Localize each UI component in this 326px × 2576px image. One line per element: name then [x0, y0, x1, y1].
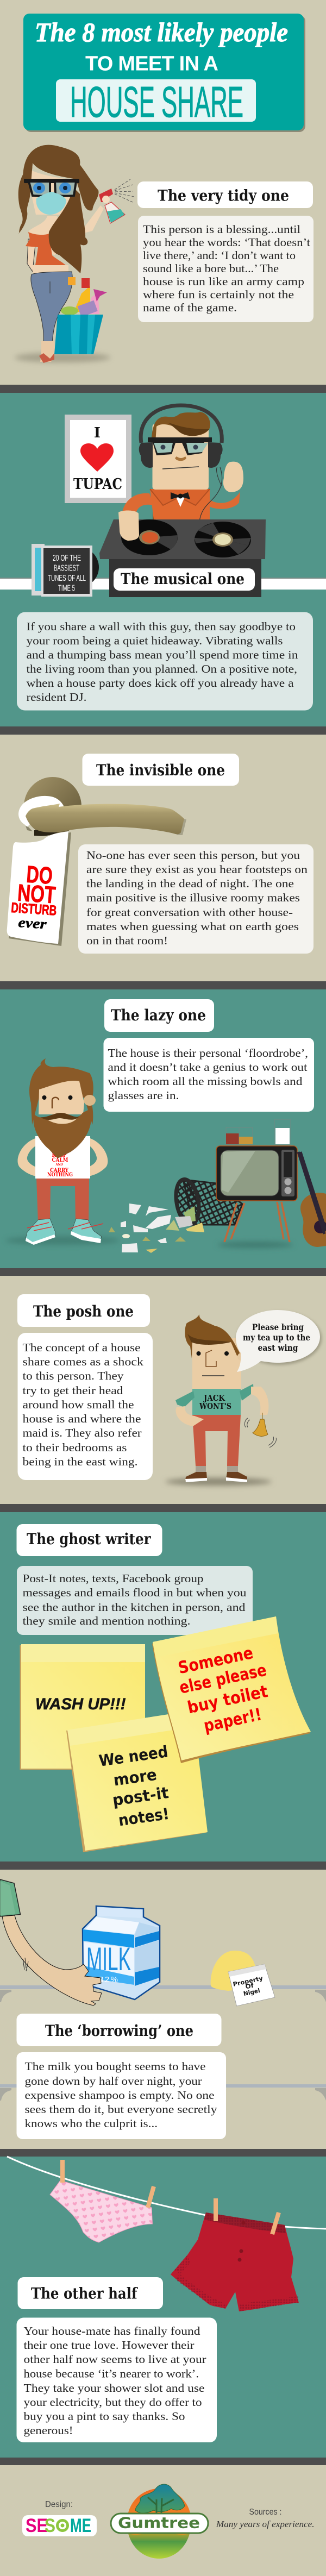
text block: other half description: They take your shower slot and use: [24, 2381, 204, 2395]
text block: musical description: resident DJ.: [26, 691, 87, 704]
heading: the very tidy one: The very tidy one: [158, 187, 289, 204]
text block: posh description: to this person. They: [23, 1369, 124, 1382]
text block: other half description: house because ‘it’s nearer to work’.: [24, 2367, 199, 2380]
text block: tidy description: This person is a blessing...until: [143, 223, 300, 236]
panel: the borrowing one: [0, 1870, 326, 2149]
text block: lazy description: The house is their personal ‘floordrobe’,: [108, 1046, 308, 1060]
heading: the very tidy one: [137, 181, 313, 208]
heading: the borrowing one: [16, 2014, 222, 2046]
illustration: washing line with underwear: [7, 2157, 326, 2311]
panel: the invisible one: [0, 735, 326, 981]
illustration: retro TV with drinks and guitar: [216, 1119, 326, 1248]
heading: the other half: The other half: [31, 2284, 138, 2303]
speech bubble: east wing: [258, 1343, 298, 1353]
illustration: cheese with label: Property: [233, 1975, 264, 1988]
poster: I love Tupac: TUPAC: [73, 476, 122, 493]
heading: the invisible one: The invisible one: [96, 761, 225, 779]
title plate: [56, 78, 256, 126]
post-it: someone else please buy toilet paper: buy toilet: [186, 1682, 269, 1718]
heading: the musical one: The musical one: [121, 570, 244, 588]
text block: tidy description: [138, 216, 314, 322]
illustration: cheese with label: [211, 1951, 275, 2006]
text block: tidy description: sound like a bore but...’ The: [143, 262, 279, 275]
heading: the ghost writer: The ghost writer: [27, 1530, 152, 1548]
text block: musical description: when a house party does kick off you already have a: [26, 676, 294, 690]
CD cover text: 20 OF THE: [53, 554, 81, 563]
logo: Gumtree: [111, 2484, 208, 2559]
panel: the other half: [0, 2157, 326, 2458]
post-it: someone else please buy toilet paper: [152, 1616, 311, 1763]
design credit: SE: [26, 2515, 48, 2536]
text block: borrowing description: knows who the culprit is...: [25, 2117, 158, 2130]
design credit: S: [45, 2515, 55, 2536]
sources credit: Many years of experience.: [216, 2519, 314, 2529]
CD cover text: [48, 554, 86, 593]
post-it: we need more post-it notes: notes!: [117, 1804, 171, 1829]
text block: musical description: [17, 612, 313, 711]
text block: posh description: maid is. They also refer: [23, 1426, 142, 1439]
text block: invisible description: for great conversation with other house-: [86, 906, 293, 919]
illustration: bearded hipster: [5, 1058, 120, 1245]
text block: tidy description: house is run like an army camp: [143, 275, 304, 288]
CD cover text: TIME 5: [58, 584, 75, 593]
logo: Gumtree: Gumtree: [118, 2514, 200, 2532]
heading: the lazy one: [104, 999, 214, 1032]
text block: tidy description: where fun is certainly not the: [143, 288, 294, 301]
text block: borrowing description: The milk you bought seems to have: [25, 2060, 205, 2073]
heading: the ghost writer: [16, 1524, 162, 1556]
post-it: we need more post-it notes: post-it: [111, 1783, 170, 1809]
heading: the posh one: The posh one: [33, 1302, 134, 1320]
CD cover text: TUNES OF ALL: [48, 574, 86, 583]
speech bubble: Please bring: [252, 1322, 304, 1332]
text block: borrowing description: sees them do it, but everyone secretly: [25, 2103, 217, 2116]
text block: ghost writer description: Post-It notes, texts, Facebook group: [23, 1572, 203, 1585]
text block: borrowing description: [16, 2052, 226, 2139]
text block: invisible description: on in that room!: [86, 934, 168, 947]
illustration: milk carton: MILK: [86, 1941, 131, 1977]
post-it: wash up: WASH UP!!!: [35, 1695, 126, 1713]
heading: the posh one: [17, 1294, 150, 1327]
shirt text: [199, 1393, 231, 1411]
text block: other half description: generous!: [24, 2424, 73, 2437]
design credit: ME: [70, 2515, 91, 2536]
text block: invisible description: are sure they exist as you hear footsteps on: [86, 863, 308, 876]
shirt text: WONT'S: [199, 1401, 231, 1411]
text block: tidy description: live there,’ and: ‘I don’t want to: [143, 249, 296, 262]
design credit: Design:: [45, 2500, 73, 2509]
panel: the posh one: [0, 1276, 326, 1504]
illustration: posh character with bell: [165, 1314, 276, 1486]
post-it: wash up: [20, 1644, 145, 1770]
shirt slogan: CARRY: [50, 1168, 69, 1174]
sources credit: [216, 2508, 314, 2529]
heading: the lazy one: The lazy one: [111, 1006, 206, 1024]
text block: posh description: around how small the: [23, 1398, 134, 1411]
panel: the lazy one: [0, 989, 326, 1268]
title banner: [23, 14, 305, 132]
hanger text: do not disturb ever: DISTURB: [10, 899, 57, 919]
text block: invisible description: the landing in the dead of night. The one: [86, 877, 294, 890]
text block: posh description: try to get their head: [23, 1384, 123, 1397]
post-it: someone else please buy toilet paper: paper!!: [202, 1704, 264, 1736]
text block: posh description: The concept of a house: [23, 1341, 140, 1354]
title line 2: TO MEET IN A: [85, 52, 218, 75]
text block: posh description: [17, 1333, 153, 1480]
illustration: door handle and hanger: [7, 777, 186, 946]
text block: musical description: and a thumping bass mean you’ll spend more time in: [26, 648, 298, 661]
text block: lazy description: which room all the missing bowls and: [108, 1075, 303, 1088]
illustration: reaching arm: [0, 1879, 102, 2005]
text block: lazy description: glasses are in.: [108, 1089, 179, 1102]
text block: other half description: other half now seems to live at your: [24, 2353, 206, 2366]
shirt slogan: KEEP: [52, 1152, 67, 1158]
text block: invisible description: No-one has ever seen this person, but you: [86, 849, 300, 862]
post-it: we need more post-it notes: [66, 1710, 208, 1852]
post-it: someone else please buy toilet paper: Someone: [177, 1643, 255, 1678]
hanger text: do not disturb ever: DO: [26, 861, 53, 889]
heading: the other half: [17, 2277, 163, 2309]
hanger text: do not disturb ever: [10, 860, 60, 933]
text block: ghost writer description: they smile and mention nothing.: [23, 1614, 190, 1627]
text block: ghost writer description: messages and emails flood in but when you: [23, 1586, 247, 1599]
post-it: we need more post-it notes: more: [112, 1765, 158, 1789]
hanger text: do not disturb ever: ever: [18, 914, 48, 932]
text block: other half description: your electricity, but they do offer to: [24, 2396, 202, 2409]
speech bubble: my tea up to the: [243, 1332, 310, 1343]
illustration: tipped bin and rubbish: [109, 1177, 242, 1253]
text block: other half description: buy you a pint to say thanks. So: [24, 2410, 185, 2423]
text block: other half description: their one true love. However their: [24, 2339, 195, 2352]
title line 1: The 8 most likely people: [35, 17, 288, 47]
panel: the ghost writer: [0, 1512, 326, 1862]
panel: footer: [0, 2465, 326, 2576]
illustration: CD case: [32, 544, 99, 597]
CD cover text: BASSIEST: [54, 564, 79, 573]
illustration: tidy woman with spray and bucket: [15, 145, 134, 363]
text block: other half description: [16, 2318, 217, 2442]
speech bubble: [236, 1310, 322, 1372]
text block: tidy description: you hear the words: ‘That doesn’t: [143, 236, 310, 249]
hanger text: do not disturb ever: NOT: [17, 880, 57, 908]
poster: I love Tupac: I: [94, 425, 101, 441]
text block: posh description: being in the east wing.: [23, 1455, 138, 1468]
shirt slogan: CALM: [52, 1157, 68, 1163]
text block: invisible description: mates when guessing what on earth goes: [86, 920, 299, 933]
shirt text: JACK: [203, 1393, 225, 1403]
text block: ghost writer description: see the author in the kitchen in person, and: [23, 1601, 246, 1614]
shirt slogan: [47, 1152, 73, 1178]
text block: invisible description: main positive is the illusive roomy makes: [86, 891, 300, 904]
text block: invisible description: [78, 844, 314, 954]
text block: borrowing description: gone down by half over night, your: [25, 2074, 202, 2088]
text block: musical description: the living room than you planned. On a positive note,: [26, 662, 297, 675]
text block: posh description: share comes as a shock: [23, 1355, 144, 1368]
text block: musical description: your room being a quiet hideaway. Vibrating walls: [26, 634, 283, 647]
text block: borrowing description: expensive shampoo is empty. No one: [25, 2089, 214, 2102]
illustration: DJ decks: [99, 510, 266, 597]
poster: I love Tupac: [65, 415, 131, 503]
text block: ghost writer description: [17, 1566, 253, 1635]
sources credit: Sources :: [249, 2508, 281, 2517]
shirt slogan: NOTHING: [47, 1172, 73, 1178]
illustration: milk carton: 3.2 %: [99, 1975, 118, 1984]
text block: musical description: If you share a wall with this guy, then say goodbye to: [26, 620, 296, 633]
text block: other half description: Your house-mate has finally found: [24, 2324, 200, 2337]
post-it: someone else please buy toilet paper: else please: [178, 1660, 268, 1698]
text block: lazy description: [103, 1038, 314, 1112]
heading: the borrowing one: The ‘borrowing’ one: [45, 2022, 193, 2040]
heading: the invisible one: [83, 754, 239, 786]
panel: the musical one: [0, 393, 326, 726]
illustration: cheese with label: Nigel: [243, 1987, 261, 1997]
illustration: DJ character: [122, 405, 243, 532]
shirt slogan: AND: [55, 1163, 63, 1167]
illustration: milk carton: [83, 1906, 160, 2000]
panel: the very tidy one: [0, 0, 326, 385]
text block: tidy description: name of the game.: [143, 301, 237, 314]
text block: posh description: house is and where the: [23, 1412, 141, 1425]
post-it: we need more post-it notes: We need: [98, 1742, 169, 1770]
illustration: cheese with label: Of: [245, 1982, 254, 1990]
shelves: [0, 1985, 326, 2101]
design credit: [22, 2500, 97, 2536]
text block: lazy description: and it doesn’t take a genius to work out: [108, 1061, 308, 1074]
text block: posh description: to their bedrooms as: [23, 1441, 127, 1454]
